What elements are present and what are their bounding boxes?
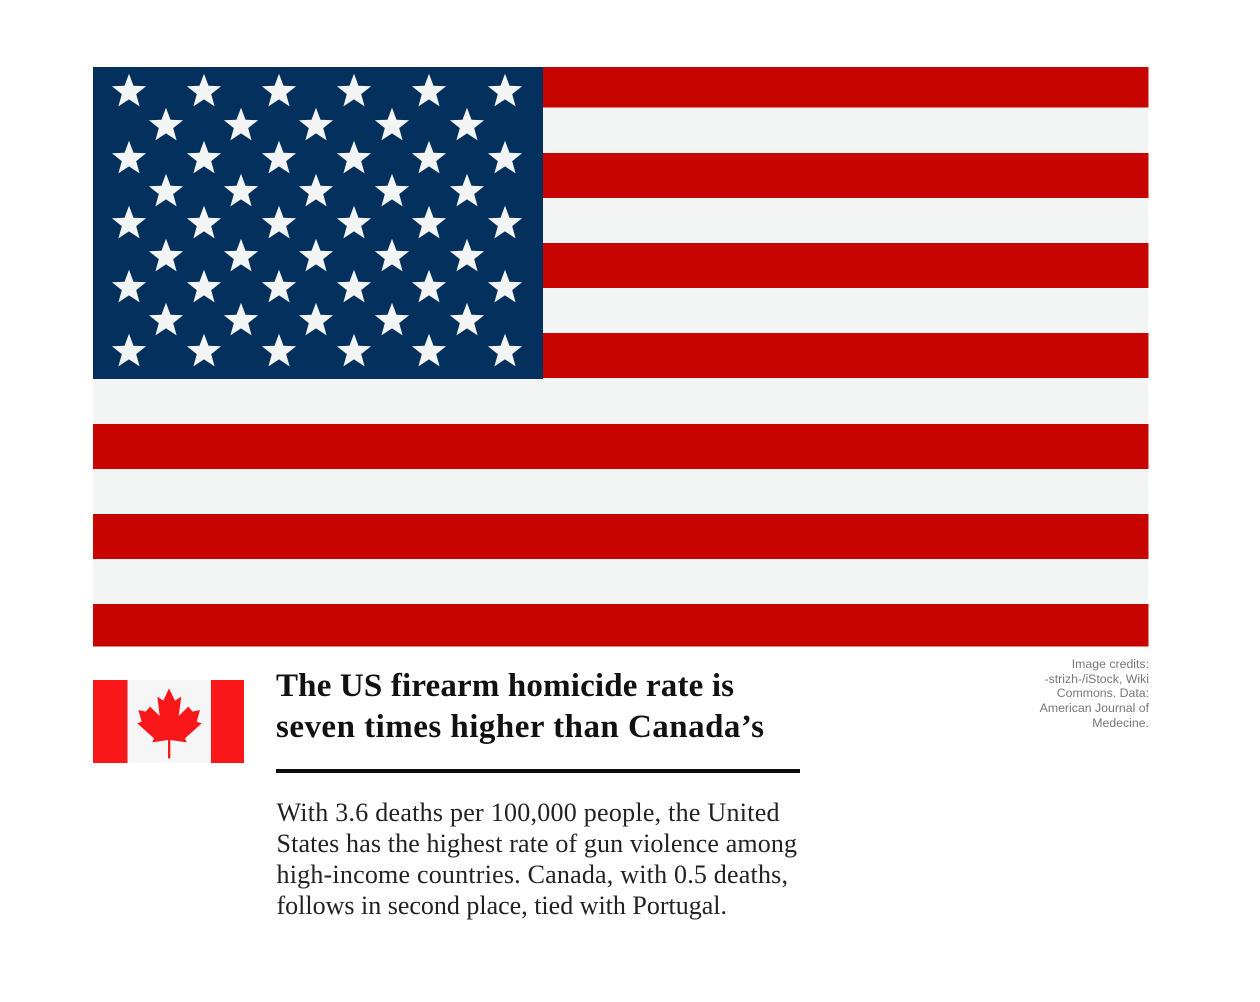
image credits: -strizh-/iStock, Wiki bbox=[1044, 672, 1149, 686]
image credits bbox=[1040, 657, 1150, 730]
image credits: Medecine. bbox=[1092, 716, 1149, 730]
icon: US flag bbox=[93, 67, 1148, 646]
image credits: Commons. Data: bbox=[1057, 686, 1149, 700]
body text: With 3.6 deaths per 100,000 people, the United bbox=[276, 798, 780, 827]
blue canton with stars bbox=[93, 67, 543, 379]
body text: high-income countries. Canada, with 0.5 deaths, bbox=[276, 860, 788, 889]
icon: maple leaf bbox=[137, 688, 202, 758]
body text: States has the highest rate of gun violence among bbox=[276, 829, 797, 858]
title bbox=[276, 668, 764, 745]
divider rule bbox=[276, 769, 800, 773]
body text: follows in second place, tied with Portugal. bbox=[276, 891, 727, 920]
icon: Canadian flag bbox=[93, 680, 244, 763]
title: The US firearm homicide rate is bbox=[276, 668, 734, 704]
image credits: Image credits: bbox=[1072, 657, 1149, 671]
red and white stripes bbox=[93, 67, 1148, 646]
body text bbox=[276, 798, 797, 920]
title: seven times higher than Canada’s bbox=[276, 709, 764, 745]
image credits: American Journal of bbox=[1040, 701, 1150, 715]
